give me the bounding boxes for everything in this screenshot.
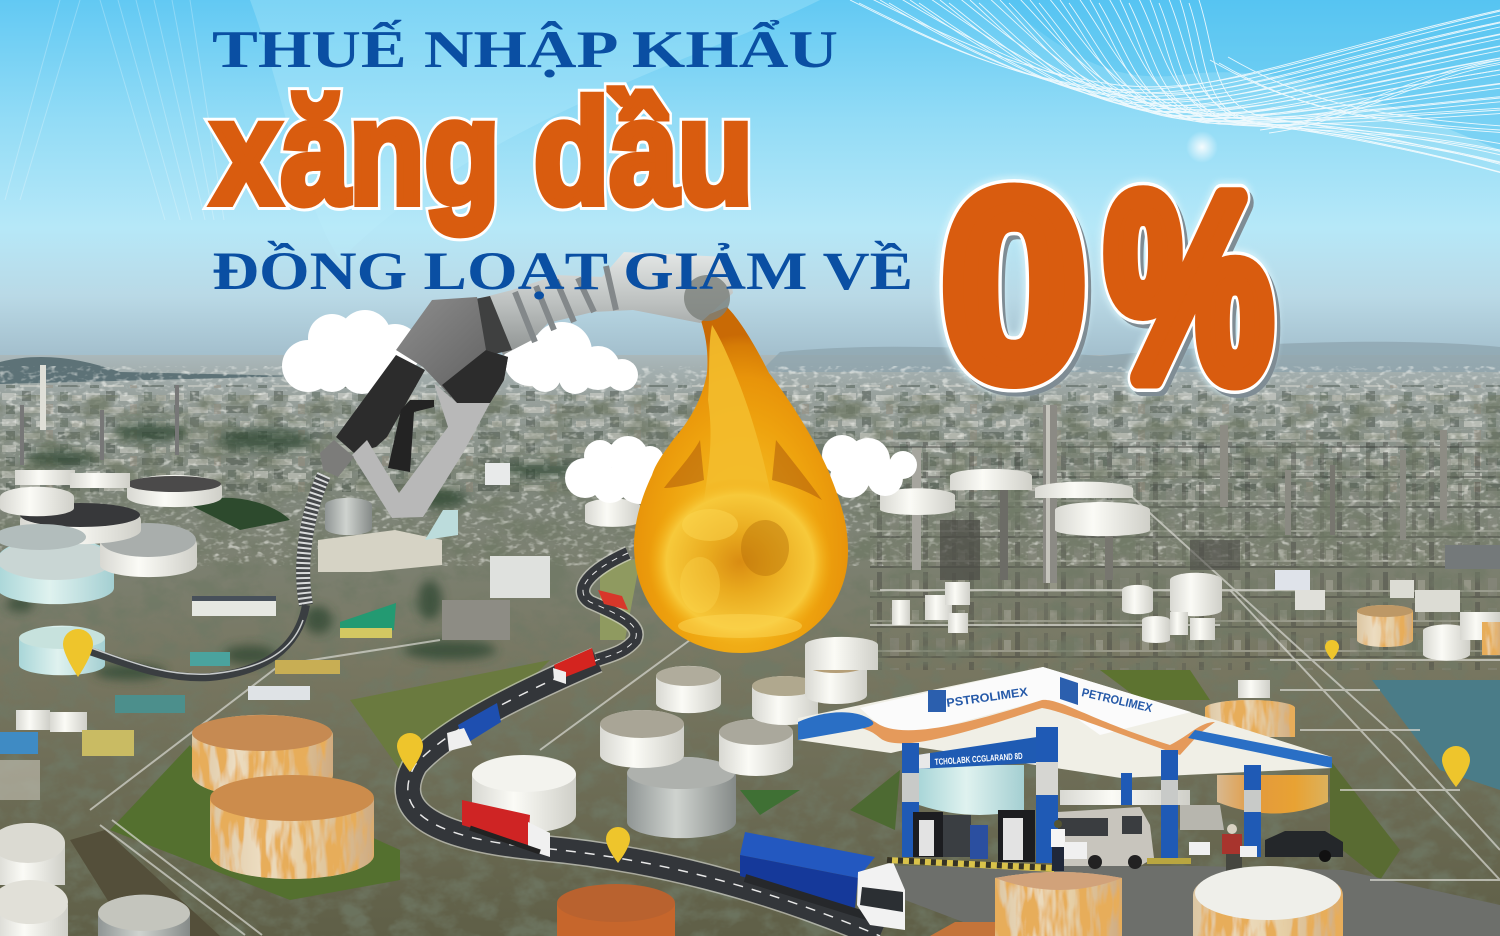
central buildings	[190, 463, 550, 674]
spout opening	[684, 275, 730, 321]
clouds	[282, 310, 917, 504]
glow	[943, 139, 1272, 434]
pipelines and roads	[90, 495, 1500, 935]
white outline: 0	[943, 139, 1085, 432]
title: line 3: ĐỒNG LOẠT GIẢM VỀ	[212, 240, 913, 301]
big blue container truck	[740, 832, 905, 930]
grip head	[396, 297, 508, 403]
shadow	[947, 144, 1276, 439]
hose lower	[80, 605, 306, 677]
white outline	[943, 139, 1272, 434]
trigger guard	[352, 383, 490, 518]
hose collar	[320, 440, 354, 477]
canopy blue right end	[1188, 730, 1332, 768]
shadow: 0	[947, 144, 1089, 437]
background: sky	[0, 0, 1500, 380]
title: xăng dầu: xăng dầu	[212, 70, 753, 235]
tree clumps	[6, 422, 580, 680]
orange fill: %	[1106, 141, 1272, 434]
canopy fascia white	[860, 667, 1191, 740]
hose upper	[303, 475, 324, 605]
hose highlight	[82, 620, 303, 674]
oil drop	[634, 307, 848, 653]
canopy logos and names: PETROLIMEX	[1080, 685, 1154, 715]
trigger	[388, 400, 434, 472]
forecourt	[895, 866, 1500, 936]
blue sign board	[917, 737, 1037, 769]
map pin at hose end	[63, 629, 93, 677]
canopy ceiling	[798, 667, 1332, 778]
road near section	[408, 660, 880, 936]
neck collar	[470, 296, 512, 355]
canopy logos and names	[928, 677, 1154, 715]
storage tanks right	[880, 469, 1500, 737]
ground: aerial view of refinery	[0, 342, 1500, 936]
spout	[481, 252, 733, 355]
canopy logos and names: PSTROLIMEX	[945, 685, 1029, 710]
glow: 0	[943, 139, 1085, 432]
orange fill: 0	[943, 139, 1085, 432]
person	[1051, 820, 1065, 871]
storage tanks bottom	[0, 823, 1032, 936]
red container truck	[462, 800, 550, 857]
title: xăng dầu: xăng dầu	[212, 70, 753, 235]
handle	[336, 355, 425, 453]
background tanks under canopy	[919, 765, 1024, 815]
storage tanks left	[0, 470, 310, 800]
van	[1058, 807, 1154, 869]
canopy orange band	[798, 700, 1215, 755]
storage tanks centre	[192, 499, 878, 879]
columns	[902, 727, 1261, 863]
red truck mid	[553, 648, 596, 684]
lens flare	[1186, 131, 1218, 163]
orange fill	[943, 139, 1272, 434]
decorative white wave lines	[850, 0, 1500, 175]
small sign boards	[1064, 842, 1257, 859]
blue sign board: TCHOLABK CCGLARAND 8D	[934, 751, 1023, 767]
fuel pumps	[913, 810, 1035, 862]
green and soil patches	[190, 498, 290, 530]
shadow: %	[1110, 146, 1276, 439]
blue truck	[447, 703, 501, 751]
title: line 1: THUẾ NHẬP KHẨU	[212, 19, 838, 79]
spout ribs	[515, 266, 616, 342]
red truck far	[598, 590, 628, 610]
car	[1265, 831, 1343, 862]
foreground tanks	[995, 866, 1343, 936]
map pins	[397, 640, 1470, 863]
hose winding	[303, 475, 324, 605]
motorbike rider	[1222, 824, 1242, 874]
trucks on road	[447, 590, 905, 930]
canopy blue left end	[798, 712, 873, 740]
road far section	[583, 553, 636, 660]
tanker	[1180, 805, 1224, 830]
hazard strip	[887, 857, 1191, 872]
refinery stacks and columns	[20, 365, 1447, 583]
petrol station	[798, 667, 1343, 874]
big 0%	[943, 139, 1276, 439]
white outline: %	[1106, 141, 1272, 434]
fuel nozzle and hose	[63, 252, 733, 677]
glow: %	[1106, 141, 1272, 434]
